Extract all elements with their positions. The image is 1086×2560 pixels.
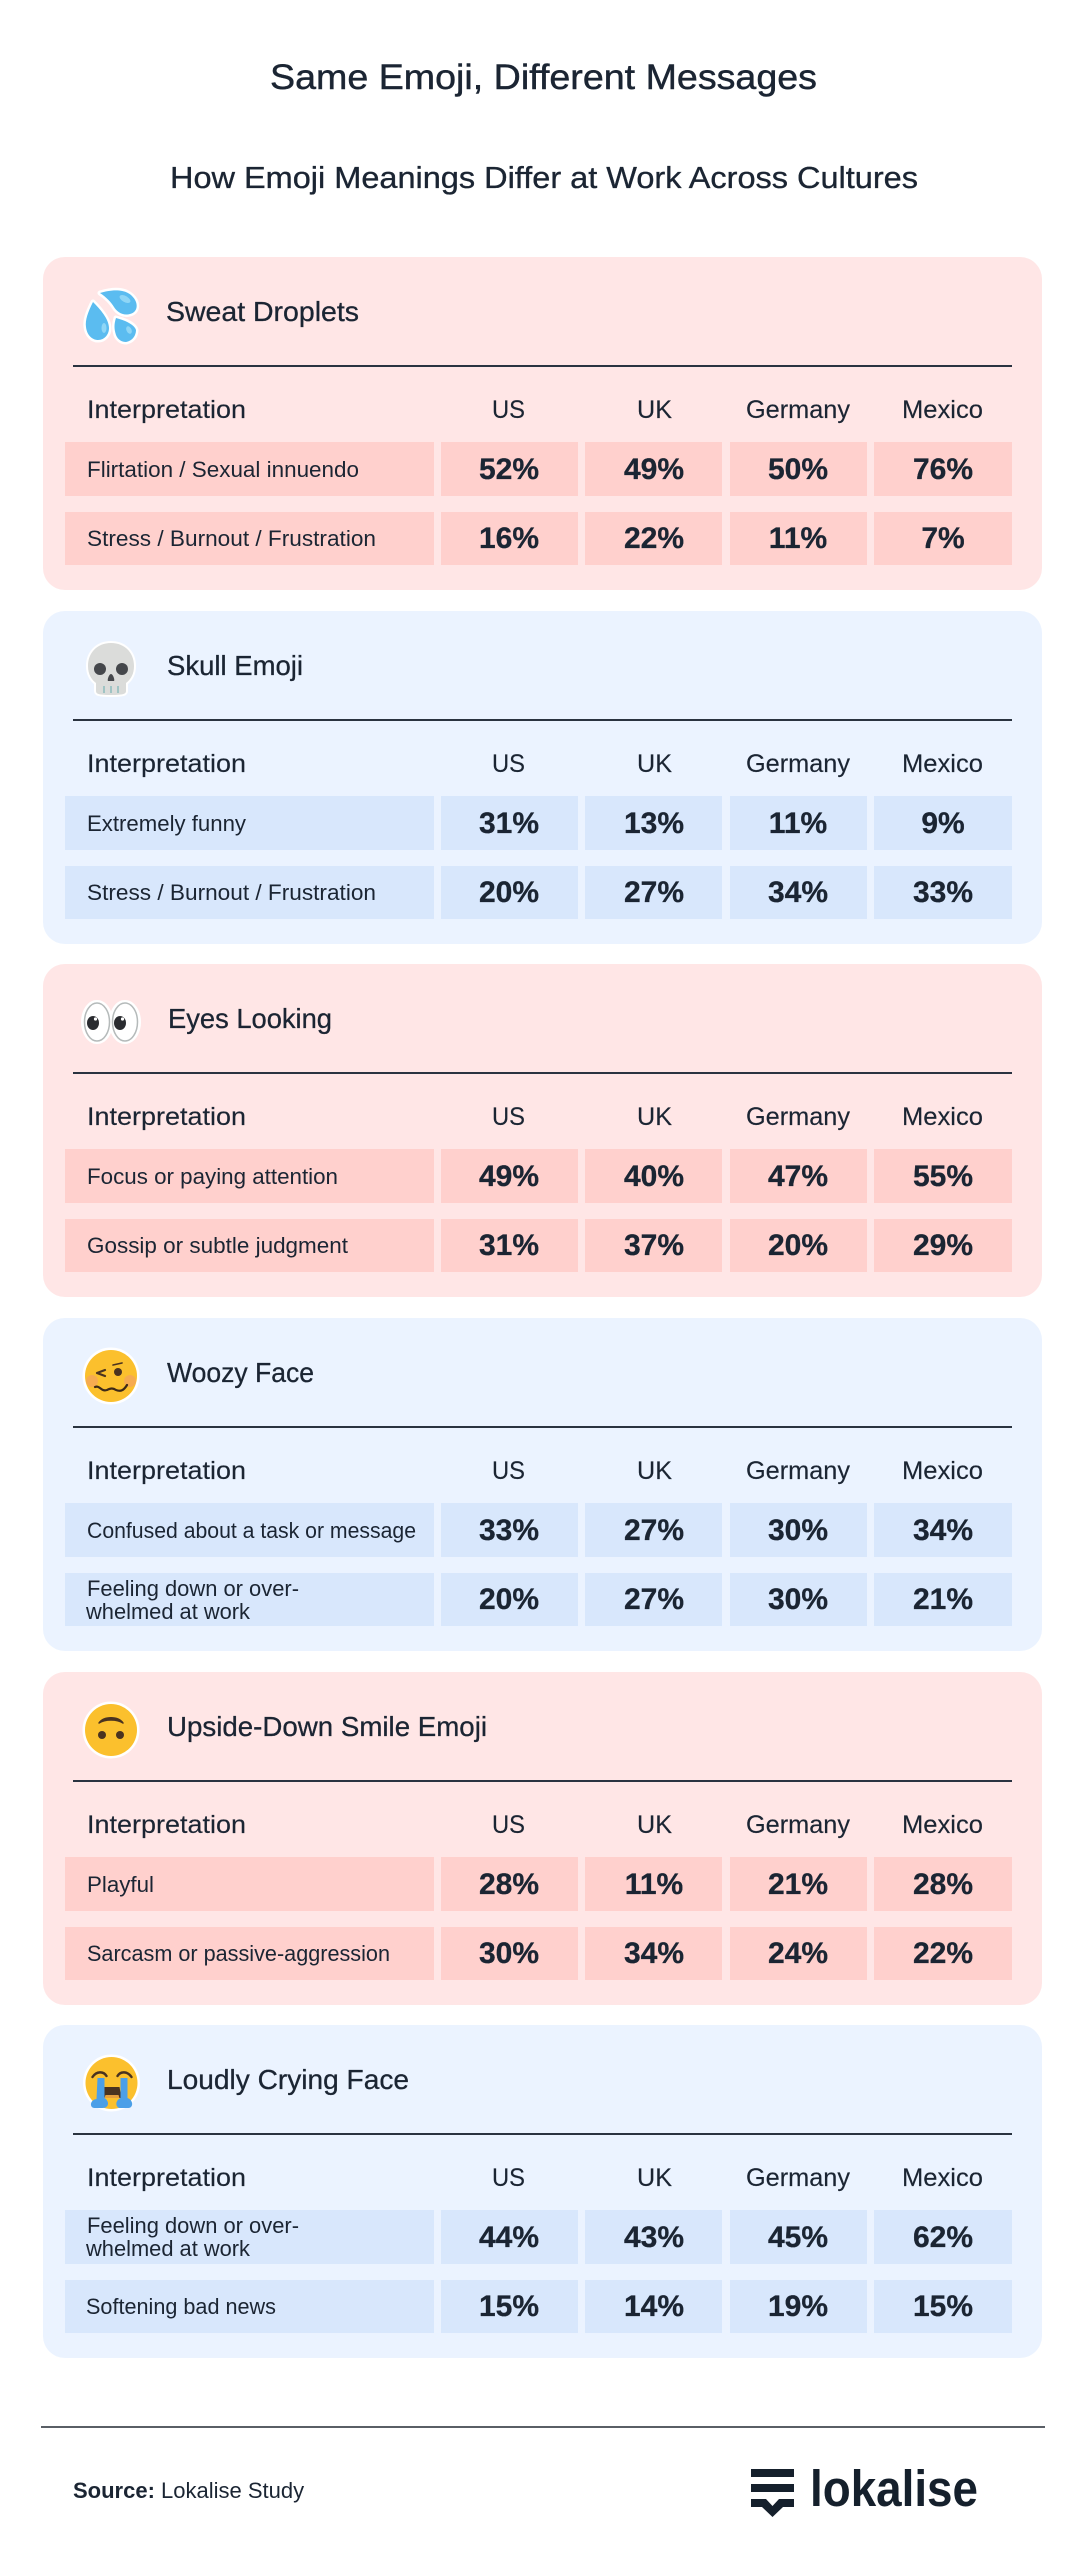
panel: loudly crying face (43, 2025, 1042, 2358)
icon: sweat droplets emoji (86, 290, 137, 342)
table row 1: 33% (479, 1514, 539, 1547)
icon: upside-down smile emoji (85, 1704, 137, 1756)
table row 1: 40% (624, 1160, 684, 1193)
table header: UK (637, 1103, 672, 1131)
heading: Sweat Droplets (166, 296, 359, 327)
table row 1: Focus or paying attention (87, 1164, 338, 1189)
table row 2: 14% (624, 2290, 684, 2323)
table row 1: Extremely funny (87, 811, 246, 836)
table row 2: 27% (624, 1583, 684, 1616)
table row 1: whelmed at work (85, 2236, 251, 2261)
table row 1: 43% (624, 2221, 684, 2254)
table row 1: 44% (479, 2221, 539, 2254)
table header: Interpretation (87, 750, 246, 778)
logo: lokalise (751, 2460, 978, 2517)
table header: US (492, 1811, 525, 1839)
icon: loudly crying face emoji (86, 2057, 138, 2109)
table header (87, 1457, 983, 1485)
table row 1: 45% (768, 2221, 828, 2254)
icon: skull emoji (88, 643, 134, 695)
table row 1: 9% (921, 807, 965, 840)
table row 2: Softening bad news (86, 2294, 276, 2319)
table header: Germany (746, 2164, 851, 2192)
table row 2: 24% (768, 1937, 828, 1970)
table row 1: 21% (768, 1868, 828, 1901)
table header: US (492, 396, 525, 424)
table header: US (492, 2164, 525, 2192)
table header: US (492, 750, 525, 778)
table row 2: 15% (913, 2290, 973, 2323)
table header: UK (637, 2164, 672, 2192)
table row 1: 47% (768, 1160, 828, 1193)
heading: Skull Emoji (167, 650, 303, 681)
table row 1: 11% (769, 807, 827, 840)
table row 1: 49% (624, 453, 684, 486)
table row 2: 33% (913, 876, 973, 909)
table row 2: Feeling down or over- (87, 1576, 299, 1601)
table row 1: 50% (768, 453, 828, 486)
table header: Germany (746, 1103, 851, 1131)
table header: UK (637, 1457, 672, 1485)
panel: sweat droplets (43, 257, 1042, 590)
table row 1: 27% (624, 1514, 684, 1547)
table header: Interpretation (87, 2164, 246, 2192)
table header: Germany (746, 1811, 851, 1839)
table row 2: whelmed at work (85, 1599, 251, 1624)
panel: skull emoji (43, 611, 1042, 944)
table row 2: 11% (769, 522, 827, 555)
table row 2: 27% (624, 876, 684, 909)
table row 1: 34% (913, 1514, 973, 1547)
table row 2: 37% (624, 1229, 684, 1262)
table row 2: 7% (921, 522, 965, 555)
table header: UK (637, 1811, 672, 1839)
table row 1: 30% (768, 1514, 828, 1547)
table header (87, 1103, 983, 1131)
table row 1: 76% (913, 453, 973, 486)
table row 2: Stress / Burnout / Frustration (87, 880, 376, 905)
heading: Woozy Face (167, 1357, 314, 1388)
table header: Mexico (902, 1457, 983, 1485)
table row 1: Flirtation / Sexual innuendo (87, 457, 359, 482)
table row 2 (65, 1573, 1012, 1626)
table row 2 (65, 1927, 1012, 1980)
table row 2: 22% (624, 522, 684, 555)
table row 1: Playful (87, 1872, 154, 1897)
table row 2: 31% (479, 1229, 539, 1262)
heading: Upside-Down Smile Emoji (167, 1711, 487, 1742)
table header: Germany (746, 1457, 851, 1485)
table row 1: 28% (913, 1868, 973, 1901)
heading: Eyes Looking (168, 1003, 332, 1034)
table header (87, 1811, 983, 1839)
table row 2: Sarcasm or passive-aggression (87, 1941, 390, 1966)
table row 2: 34% (624, 1937, 684, 1970)
table header (87, 2164, 983, 2192)
table header: Germany (746, 396, 851, 424)
heading: Loudly Crying Face (167, 2064, 409, 2095)
table row 2: 21% (913, 1583, 973, 1616)
table header: Germany (746, 750, 851, 778)
table row 2: 19% (768, 2290, 828, 2323)
panel: eyes looking (43, 964, 1042, 1297)
table row 1: 49% (479, 1160, 539, 1193)
table row 2: 20% (479, 1583, 539, 1616)
table row 2 (65, 1219, 1012, 1272)
table row 1: 52% (479, 453, 539, 486)
table row 1: 28% (479, 1868, 539, 1901)
table header: Mexico (902, 396, 983, 424)
table row 2: 20% (768, 1229, 828, 1262)
table row 2: 15% (479, 2290, 539, 2323)
table row 1: 55% (913, 1160, 973, 1193)
table row 2: Stress / Burnout / Frustration (87, 526, 376, 551)
table row 2: 20% (479, 876, 539, 909)
table row 1: Confused about a task or message (87, 1518, 416, 1543)
table header: Interpretation (87, 1811, 246, 1839)
table row 2: 16% (479, 522, 539, 555)
table row 1 (65, 1149, 1012, 1203)
table row 2 (65, 2280, 1012, 2333)
table header: Interpretation (87, 396, 246, 424)
table header: US (492, 1457, 525, 1485)
table header: Mexico (902, 2164, 983, 2192)
source note: Source: Lokalise Study (73, 2478, 304, 2503)
table row 1: 62% (913, 2221, 973, 2254)
icon: eyes emoji (84, 1003, 138, 1041)
table row 1: 11% (625, 1868, 683, 1901)
subtitle: How Emoji Meanings Differ at Work Across Cultures (170, 160, 918, 195)
table row 1: Feeling down or over- (87, 2213, 299, 2238)
panel: upside-down smile (43, 1672, 1042, 2005)
table row 1: 13% (624, 807, 684, 840)
table header: UK (637, 750, 672, 778)
panel: woozy face (43, 1318, 1042, 1651)
table header: Interpretation (87, 1457, 246, 1485)
table header: UK (637, 396, 672, 424)
table header: Interpretation (87, 1103, 246, 1131)
table row 2: 22% (913, 1937, 973, 1970)
icon: woozy face emoji (85, 1350, 137, 1402)
table header: Mexico (902, 1103, 983, 1131)
table row 1 (65, 796, 1012, 850)
logo: lokalise: lokalise (810, 2460, 978, 2517)
table header: Mexico (902, 750, 983, 778)
table row 2: 30% (768, 1583, 828, 1616)
table row 2: 29% (913, 1229, 973, 1262)
table header (87, 750, 983, 778)
table header: US (492, 1103, 525, 1131)
table header (87, 396, 983, 424)
table row 2: 34% (768, 876, 828, 909)
table row 2: Gossip or subtle judgment (87, 1233, 348, 1258)
table row 2: 30% (479, 1937, 539, 1970)
table row 1 (65, 1503, 1012, 1557)
table row 1: 31% (479, 807, 539, 840)
table row 2 (65, 866, 1012, 919)
table header: Mexico (902, 1811, 983, 1839)
table row 2 (65, 512, 1012, 565)
table row 1 (65, 442, 1012, 496)
title: Same Emoji, Different Messages (270, 58, 817, 97)
table row 1 (65, 2210, 1012, 2264)
table row 1 (65, 1857, 1012, 1911)
